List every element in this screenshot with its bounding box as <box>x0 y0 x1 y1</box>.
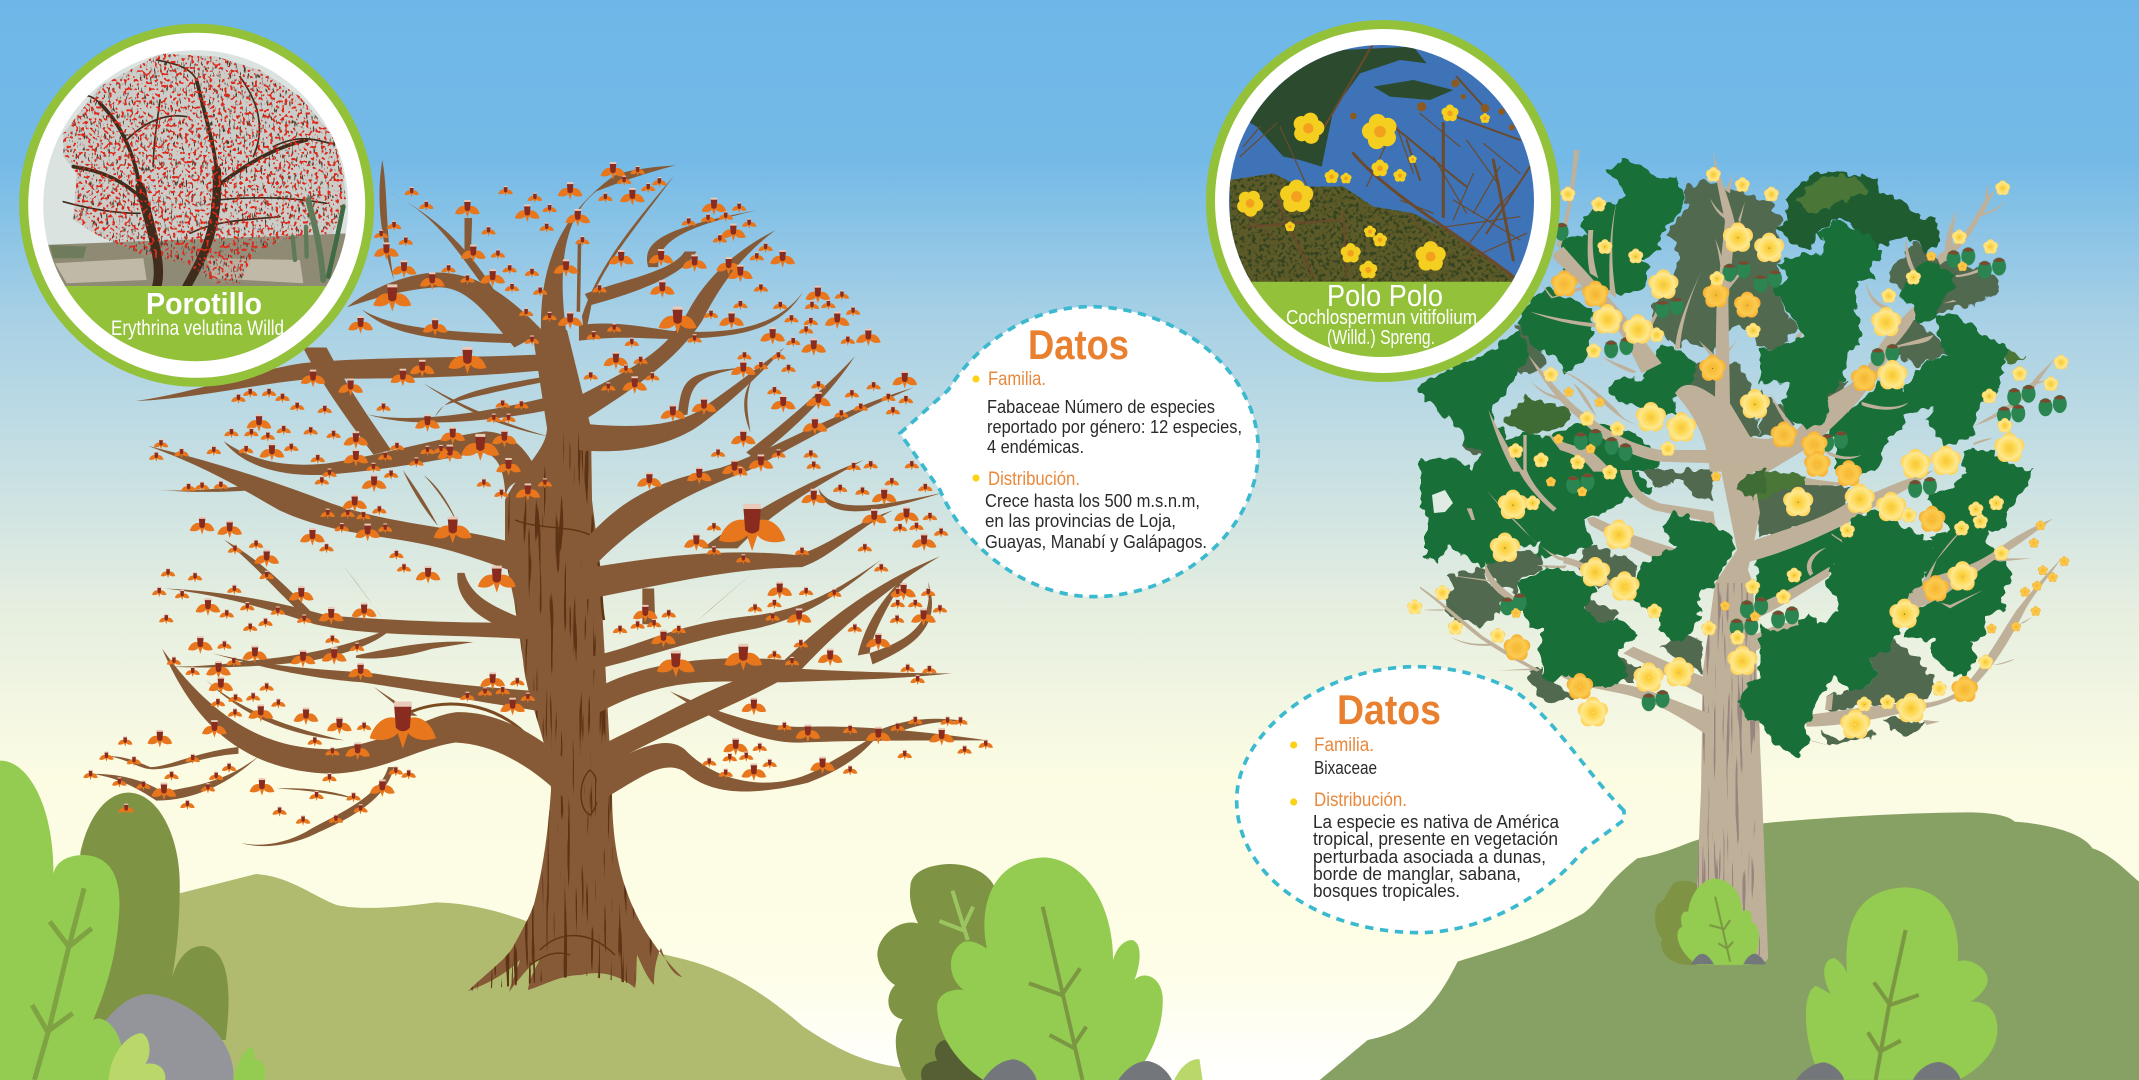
light twig <box>939 891 973 940</box>
heading Datos: Datos <box>1337 686 1441 733</box>
big rocks <box>1796 1062 1961 1080</box>
bark texture of porotillo <box>396 520 615 965</box>
callout: Datos Polo Polo <box>1237 667 1624 933</box>
scientific name: Cochlospermun vitifolium <box>1286 307 1477 329</box>
scientific name: (Willd.) Spreng. <box>1327 327 1435 349</box>
green ring <box>1210 24 1556 378</box>
trunk of polo polo <box>1694 470 1768 962</box>
branches of polo polo <box>1420 150 2060 747</box>
bark streaks of polo polo <box>1694 583 1768 955</box>
fallen flower on bush <box>118 804 134 815</box>
gray rocks <box>983 1059 1172 1080</box>
familia text: Bixaceae <box>1314 758 1377 778</box>
light green front bush <box>937 857 1163 1080</box>
distribucion text: borde de manglar, sabana, <box>1313 864 1521 884</box>
big light bush <box>1806 887 1997 1080</box>
pale green leaf <box>109 1033 165 1080</box>
right hill <box>1320 812 2139 1080</box>
bullet distribucion <box>1290 798 1297 806</box>
photo: yellow polo polo flowers <box>1227 43 1537 287</box>
name band <box>1251 282 1512 357</box>
distribucion text <box>985 491 1207 552</box>
familia text: reportado por género: 12 especies, <box>987 417 1242 437</box>
tall light green bush <box>0 761 122 1080</box>
name band <box>65 286 326 362</box>
olive back bush <box>80 793 229 1040</box>
title Porotillo: Porotillo <box>146 286 262 321</box>
bush stems <box>32 888 92 1080</box>
distribucion text: Crece hasta los 500 m.s.n.m, <box>985 491 1200 511</box>
branches of porotillo <box>92 160 987 846</box>
bullet distribucion <box>972 474 980 482</box>
bush stems <box>1029 907 1086 1080</box>
dark shadow bush <box>921 1040 987 1080</box>
green ring <box>24 28 370 382</box>
olive back bush <box>877 864 994 1080</box>
distribucion text: Guayas, Manabí y Galápagos. <box>985 532 1207 552</box>
center bush group <box>877 857 1203 1080</box>
scientific name <box>1286 307 1477 349</box>
tree: Polo Polo <box>1407 150 2069 962</box>
bullet familia <box>1290 741 1297 749</box>
orange flowers of porotillo <box>83 162 993 826</box>
title Polo Polo: Polo Polo <box>1327 278 1443 313</box>
bullet familia <box>972 375 980 383</box>
photo: flowering porotillo tree <box>40 47 353 287</box>
familia text: 4 endémicas. <box>987 437 1084 457</box>
bark streaks of porotillo <box>468 428 682 991</box>
small light bush <box>1677 878 1759 965</box>
scientific name: Erythrina velutina Willd <box>111 317 284 340</box>
back foliage of polo polo <box>1420 160 2033 745</box>
left hill <box>153 874 910 1080</box>
panel: Porotillo medallion <box>24 28 370 382</box>
gray rock <box>92 994 234 1080</box>
distribucion text: bosques tropicales. <box>1313 881 1460 901</box>
pale leaf <box>1174 1059 1203 1080</box>
distribucion text: en las provincias de Loja, <box>985 511 1176 531</box>
distribucion text: La especie es nativa de América <box>1313 812 1560 832</box>
left bushes and rock <box>0 761 265 1080</box>
label familia: Familia. <box>988 369 1046 390</box>
distribucion text <box>1313 812 1560 901</box>
leaf gap in foliage <box>1432 490 1453 513</box>
big bush stems <box>1868 930 1919 1080</box>
front foliage of polo polo <box>1502 172 1955 757</box>
panel: Polo Polo medallion <box>1210 24 1556 378</box>
small green leaf <box>233 1047 265 1080</box>
label distribucion: Distribución. <box>1314 790 1407 811</box>
small bush stems <box>1709 897 1733 962</box>
speech bubble <box>900 307 1258 597</box>
callout: Datos Porotillo <box>900 307 1258 597</box>
distribucion text: tropical, presente en vegetación <box>1313 829 1558 849</box>
label familia: Familia. <box>1314 735 1374 756</box>
small rocks <box>1691 954 1766 964</box>
fruits of polo polo <box>1500 223 2067 711</box>
tree: Porotillo <box>83 160 993 992</box>
familia text: Fabaceae Número de especies <box>987 397 1215 417</box>
distribucion text: perturbada asociada a dunas, <box>1313 847 1546 867</box>
familia text <box>987 397 1242 457</box>
small olive bush <box>1655 881 1697 965</box>
right bushes <box>1655 878 1997 1080</box>
trunk and roots of porotillo <box>468 330 682 992</box>
label distribucion: Distribución. <box>988 469 1080 490</box>
speech bubble <box>1237 667 1624 933</box>
heading Datos: Datos <box>1028 321 1129 368</box>
yellow flowers of polo polo <box>1407 167 2069 739</box>
